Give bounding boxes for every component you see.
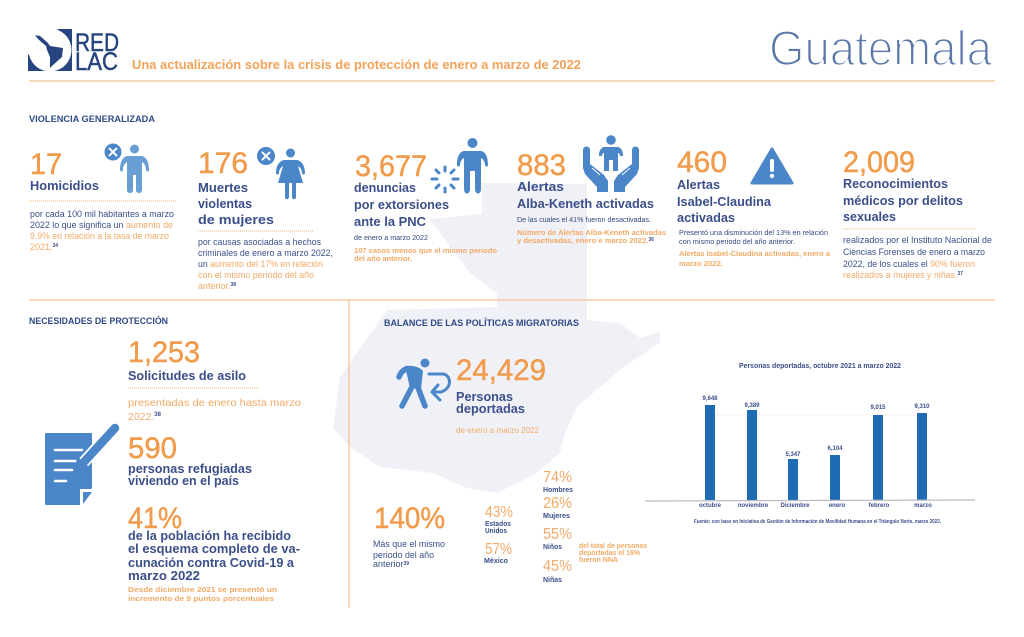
logo RedLAC: RED — [75, 29, 119, 57]
description: 34 — [53, 243, 58, 249]
panel: country split: 57% — [485, 541, 512, 558]
description — [30, 209, 174, 252]
heading: NECESIDADES DE PROTECCIÓN — [29, 315, 168, 326]
category labels: enero — [829, 503, 846, 509]
panel: 140 percent — [373, 502, 445, 569]
number: 3,677 — [355, 150, 427, 183]
description: realizados a mujeres y niñas. — [843, 270, 960, 280]
vacunacion: el esquema completo de va- — [128, 541, 300, 556]
label: Homicidios — [30, 178, 99, 193]
description — [843, 235, 992, 280]
personas refugiadas: viviendo en el país — [128, 473, 239, 488]
panel: 140 percent: 39 — [404, 561, 409, 567]
description: del año anterior. — [354, 254, 412, 263]
panel: alertas isabel-claudina: activadas — [677, 210, 735, 225]
description: con el mismo periodo del año — [198, 270, 314, 280]
vacunacion — [128, 502, 300, 603]
vacunacion: incremento de 9 puntos porcentuales — [128, 594, 274, 603]
logo RedLAC: LAC — [75, 48, 118, 76]
background map of Guatemala — [333, 183, 660, 493]
panel: alertas alba-keneth — [517, 135, 666, 245]
category labels — [699, 503, 932, 509]
panel: alertas isabel-claudina: Isabel-Claudina — [677, 194, 772, 209]
description: 2022, de los cuales el 90% fueron — [843, 259, 975, 269]
value labels: 6,104 — [827, 446, 843, 452]
logo RedLAC — [28, 28, 119, 76]
bar chart: personas deportadas — [645, 363, 975, 525]
value labels: 5,347 — [785, 452, 801, 458]
description: criminales de enero a marzo 2022, — [198, 248, 333, 258]
icon: man with x — [104, 144, 149, 193]
label: Alertas — [517, 179, 564, 194]
description — [354, 235, 497, 263]
panel: country split — [484, 504, 513, 565]
value labels: 9,648 — [702, 396, 718, 402]
panel: homicidios — [29, 144, 176, 252]
panel: sex and age split — [543, 469, 573, 584]
description: 107 casos menos que el mismo periodo — [354, 246, 497, 255]
description: De las cuales el 41% fueron desactivadas. — [517, 217, 651, 224]
panel: muertes violentas de mujeres: de mujeres — [198, 212, 274, 227]
category labels: octubre — [699, 503, 722, 509]
category labels: febrero — [869, 503, 890, 509]
note: NNA: deportadas el 16% — [579, 548, 640, 557]
number: 24,429 — [456, 354, 546, 387]
source: Fuente: con base en Iniciativa de Gestión de Información de Movilidad Humana en el Triángulo Norte, marzo 2022. — [694, 519, 941, 525]
solicitudes de asilo: presentadas de enero hasta marzo — [128, 397, 301, 409]
number: 883 — [517, 149, 566, 182]
solicitudes de asilo: 1,253 — [128, 336, 200, 369]
vacunacion: cunación contra Covid-19 a — [128, 555, 295, 570]
category labels: Diciembre — [780, 503, 810, 509]
icon: hands holding child — [583, 135, 639, 192]
label: Reconocimientos — [843, 176, 948, 191]
panel: balance de las politicas migratorias — [384, 318, 579, 435]
subtitle: Una actualización sobre la crisis de protección de enero a marzo de 2022 — [132, 57, 581, 72]
solicitudes de asilo — [128, 336, 301, 423]
solicitudes de asilo: 38 — [154, 412, 162, 418]
heading: BALANCE DE LAS POLÍTICAS MIGRATORIAS — [384, 318, 579, 328]
panel: sex and age split: Hombres — [543, 485, 573, 494]
panel: sex and age split: 74% — [543, 469, 572, 486]
description — [517, 217, 666, 245]
panel: 140 percent: anterior — [373, 559, 404, 569]
panel: country split: Unidos — [485, 526, 507, 535]
panel: alertas isabel-claudina — [677, 146, 831, 268]
description: marzo 2022. — [679, 259, 723, 268]
panel: necesidades de proteccion — [29, 315, 301, 603]
panel: denuncias por extorsiones: por extorsiones — [354, 197, 449, 212]
label: Alertas — [677, 177, 720, 192]
description: por causas asociadas a hechos — [198, 237, 321, 247]
note: NNA: fueron NNA — [579, 555, 619, 564]
panel: country split: Estados — [485, 519, 511, 528]
panel: 140 percent: periodo del año — [373, 550, 434, 560]
vacunacion: de la población ha recibido — [128, 528, 291, 543]
icon: woman with x — [257, 147, 305, 199]
description: Alertas Isabel-Claudina activadas, enero a — [679, 249, 831, 258]
description: con mismo periodo del año anterior. — [679, 239, 795, 246]
period note: de enero a marzo 2022 — [456, 426, 540, 435]
personas refugiadas: personas refugiadas — [128, 461, 252, 476]
panel: denuncias por extorsiones — [354, 138, 497, 263]
solicitudes de asilo: Solicitudes de asilo — [128, 368, 246, 383]
description: Número de Alertas Alba-Keneth activadas — [517, 228, 666, 237]
icon: man with burst — [432, 138, 488, 194]
icon: document and pen — [45, 428, 115, 505]
title: Guatemala — [769, 22, 993, 76]
number: 17 — [30, 148, 62, 181]
icon: warning triangle — [752, 149, 792, 183]
vacunacion: 41% — [128, 502, 182, 535]
panel: sex and age split: 55% — [543, 526, 572, 543]
category labels: marzo — [914, 503, 932, 509]
personas refugiadas — [128, 432, 252, 488]
bars — [705, 405, 927, 500]
label: denuncias — [354, 180, 416, 195]
value labels: 9,310 — [914, 404, 930, 410]
number: 2,009 — [843, 146, 915, 179]
description — [198, 237, 333, 291]
description: anterior. — [198, 281, 231, 291]
number: 176 — [198, 147, 248, 180]
icon: deported person running with return arrow — [399, 358, 450, 406]
description: por cada 100 mil habitantes a marzo — [30, 209, 174, 219]
panel: alertas alba-keneth: Alba-Keneth activadas — [517, 196, 654, 211]
panel: sex and age split: 26% — [543, 495, 572, 512]
solicitudes de asilo: 2022. — [128, 411, 154, 423]
value labels: 9,015 — [870, 405, 886, 411]
category labels: noviembre — [738, 503, 769, 509]
panel: 140 percent: Más que el mismo — [373, 539, 445, 549]
vacunacion: marzo 2022 — [128, 568, 200, 583]
panel: balance de las politicas migratorias: deportadas — [456, 401, 525, 416]
note: NNA — [579, 541, 647, 564]
description: Ciencias Forenses de enero a marzo — [843, 247, 985, 257]
panel: reconocimientos medicos: sexuales — [843, 209, 896, 224]
description — [679, 230, 831, 268]
panel: sex and age split: Mujeres — [543, 511, 570, 520]
panel: sex and age split: Niños — [543, 542, 562, 551]
vacunacion: Desde diciembre 2021 se presentó un — [128, 585, 277, 594]
panel: reconocimientos medicos — [843, 146, 992, 280]
panel: reconocimientos medicos: médicos por delitos — [843, 193, 963, 208]
panel: denuncias por extorsiones: ante la PNC — [354, 214, 427, 229]
description: 2021. — [30, 242, 53, 252]
description: de enero a marzo 2022 — [354, 235, 428, 242]
description: realizados por el Instituto Nacional de — [843, 235, 992, 245]
note: NNA: del total de personas — [579, 541, 647, 550]
value labels — [702, 396, 930, 458]
description: Presentó una disminución del 13% en relación — [679, 230, 828, 237]
description: un aumento del 17% en relación — [198, 259, 323, 269]
description: y desactivadas, enero e marzo 2022. — [517, 236, 646, 245]
panel: country split: 43% — [485, 504, 513, 521]
label: Personas — [456, 389, 513, 404]
description: 37 — [958, 271, 963, 277]
number: 460 — [677, 146, 727, 179]
panel: sex and age split: Niñas — [543, 575, 562, 584]
personas refugiadas: 590 — [128, 432, 177, 465]
chart title: Personas deportadas, octubre 2021 a marzo 2022 — [739, 363, 901, 370]
description: 36 — [648, 237, 654, 243]
label: Muertes — [198, 180, 248, 195]
description: 9.9% en relación a la tasa de marzo — [30, 231, 169, 241]
heading: violencia generalizada: VIOLENCIA GENERALIZADA — [29, 114, 156, 124]
panel: muertes violentas de mujeres: violentas — [198, 196, 252, 211]
description: 38 — [231, 282, 236, 288]
panel: 140 percent: 140% — [374, 502, 445, 535]
value labels: 9,389 — [744, 403, 760, 409]
description: 2022 lo que significa un aumento de — [30, 220, 173, 230]
panel: country split: México — [484, 556, 508, 565]
panel: sex and age split: 45% — [543, 558, 572, 575]
panel: muertes violentas de mujeres — [198, 147, 333, 291]
